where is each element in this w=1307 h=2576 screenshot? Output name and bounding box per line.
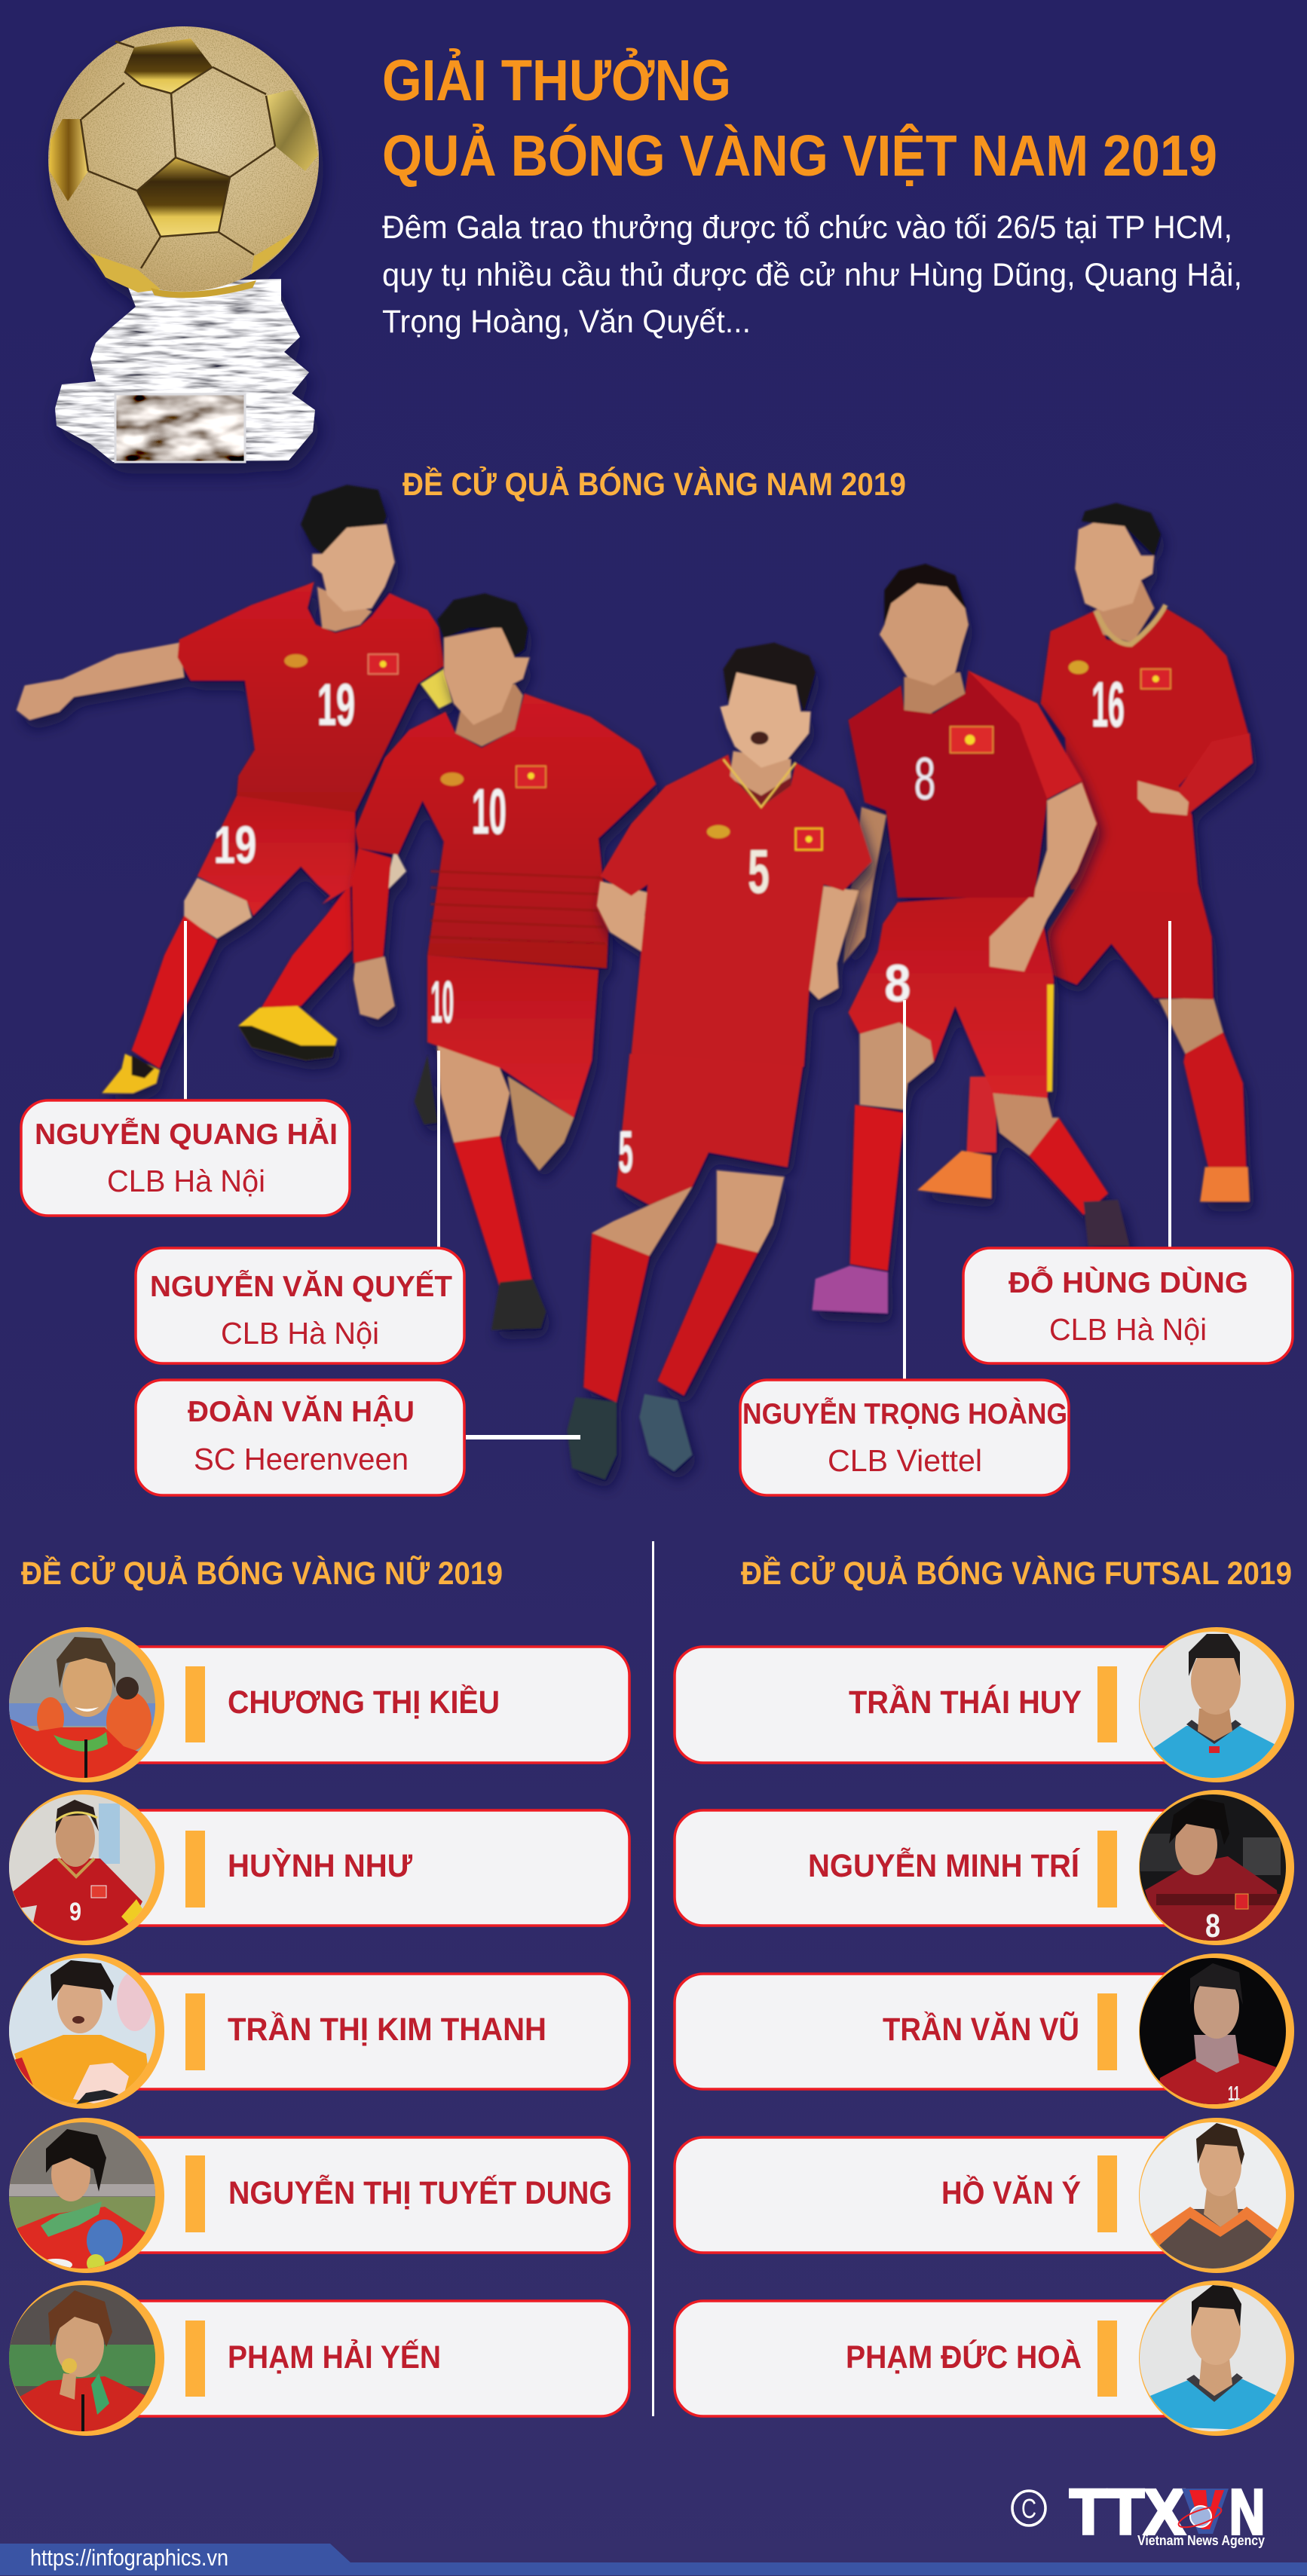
label: Đỗ Hùng Dùng: CLB Hà Nội — [1049, 1312, 1207, 1347]
panel: futsal row 1: TRẦN THÁI HUY — [849, 1684, 1082, 1721]
label: Đoàn Văn Hậu: SC Heerenveen — [194, 1442, 409, 1476]
intro text block — [382, 210, 1242, 340]
players photo group — [17, 485, 1253, 1479]
intro text block: quy tụ nhiều cầu thủ được đề cử như Hùng Dũng, Quang Hải, — [382, 257, 1242, 293]
player: Đoàn Văn Hậu — [567, 643, 871, 1479]
panel: women row 2 — [9, 1790, 629, 1945]
icon: copyright — [1012, 2491, 1045, 2526]
portrait: Trần Thị Kim Thanh — [9, 1958, 155, 2104]
heading: women's nominees: ĐỀ CỬ QUẢ BÓNG VÀNG NỮ 2019 — [21, 1555, 503, 1592]
label: Nguyễn Quang Hải: NGUYỄN QUANG HẢI — [35, 1118, 338, 1151]
connector lines — [184, 921, 1171, 1439]
panel: women row 5: PHẠM HẢI YẾN — [228, 2339, 441, 2376]
label: Đoàn Văn Hậu: ĐOÀN VĂN HẬU — [188, 1395, 415, 1428]
portrait: Nguyễn Minh Trí: 8 — [1205, 1908, 1220, 1944]
heading: men's nominees: ĐỀ CỬ QUẢ BÓNG VÀNG NAM 2019 — [403, 466, 906, 503]
portrait: Huỳnh Như: 9 — [69, 1898, 81, 1926]
panel: women row 4 — [9, 2118, 629, 2273]
panel: futsal row 4: HỒ VĂN Ý — [941, 2174, 1081, 2211]
player: Nguyễn Văn Quyết: 10 — [472, 776, 507, 848]
player: Nguyễn Trọng Hoàng: 8 — [884, 953, 911, 1012]
panel: women row 3 — [9, 1953, 629, 2109]
panel: women row 1 — [9, 1627, 629, 1782]
portrait: Huỳnh Như — [9, 1794, 155, 1941]
player: Nguyễn Quang Hải: 19 — [214, 815, 256, 874]
icon: copyright: C — [1021, 2493, 1036, 2524]
label: Nguyễn Văn Quyết: CLB Hà Nội — [221, 1316, 379, 1351]
label: Nguyễn Trọng Hoàng: CLB Viettel — [828, 1443, 982, 1478]
source url: https://infographics.vn — [30, 2544, 228, 2571]
panel: futsal row 5 — [675, 2281, 1294, 2436]
player: Nguyễn Quang Hải: 19 — [317, 672, 355, 738]
column divider — [652, 1541, 654, 2416]
panel: futsal row 5: PHẠM ĐỨC HOÀ — [846, 2339, 1082, 2376]
title: QUẢ BÓNG VÀNG VIỆT NAM 2019 — [382, 123, 1217, 188]
panel: futsal row 3 — [675, 1953, 1294, 2109]
portrait: Phạm Đức Hoà — [1140, 2285, 1286, 2431]
label: Nguyễn Quang Hải: CLB Hà Nội — [107, 1164, 265, 1198]
panel: women row 2: HUỲNH NHƯ — [228, 1848, 412, 1884]
label: Nguyễn Trọng Hoàng: NGUYỄN TRỌNG HOÀNG — [742, 1397, 1067, 1430]
label: Nguyễn Văn Quyết — [136, 1248, 464, 1363]
label: Đỗ Hùng Dùng: ĐỖ HÙNG DÙNG — [1009, 1265, 1248, 1299]
player: Nguyễn Trọng Hoàng — [812, 564, 1129, 1314]
portrait: Nguyễn Thị Tuyết Dung — [9, 2122, 155, 2272]
title: GIẢI THƯỞNG — [382, 47, 731, 113]
intro text block: Đêm Gala trao thưởng được tổ chức vào tối 26/5 tại TP HCM, — [382, 210, 1232, 246]
portrait: Trần Văn Vũ: 11 — [1228, 2082, 1240, 2105]
footer band — [0, 2544, 1307, 2575]
label: Nguyễn Trọng Hoàng — [740, 1380, 1069, 1495]
player: Đoàn Văn Hậu: 5 — [618, 1118, 633, 1185]
player: Đoàn Văn Hậu: 5 — [748, 836, 770, 906]
label: Đoàn Văn Hậu — [136, 1380, 464, 1495]
panel: futsal row 3: TRẦN VĂN VŨ — [883, 2011, 1079, 2048]
panel: women row 4: NGUYỄN THỊ TUYẾT DUNG — [228, 2174, 612, 2211]
player: Nguyễn Văn Quyết — [352, 593, 656, 1330]
player: Nguyễn Văn Quyết: 10 — [430, 969, 454, 1036]
title — [382, 47, 1217, 188]
portrait: Trần Văn Vũ — [1140, 1958, 1286, 2105]
logo: TTXVN: N — [1229, 2477, 1265, 2547]
label: Đỗ Hùng Dùng — [963, 1248, 1293, 1363]
player: Đỗ Hùng Dùng: 16 — [1091, 669, 1125, 741]
player: Nguyễn Quang Hải — [17, 485, 452, 1093]
logo: TTXVN: Vietnam News Agency — [1137, 2533, 1265, 2548]
logo: TTXVN: TTX — [1070, 2477, 1185, 2547]
panel: futsal row 2: NGUYỄN MINH TRÍ — [808, 1847, 1080, 1884]
panel: women row 5 — [9, 2281, 629, 2436]
panel: futsal row 1 — [675, 1627, 1294, 1782]
icon: golden ball trophy — [48, 26, 319, 462]
logo: TTXVN — [1070, 2477, 1265, 2548]
panel: futsal row 4 — [675, 2118, 1294, 2273]
portrait: Chương Thị Kiều — [9, 1632, 155, 1778]
panel: women row 1: CHƯƠNG THỊ KIỀU — [228, 1684, 500, 1721]
panel: futsal row 2 — [675, 1790, 1294, 1945]
portrait: Phạm Hải Yến — [9, 2285, 155, 2431]
portrait: Trần Thái Huy — [1140, 1632, 1286, 1778]
intro text block: Trọng Hoàng, Văn Quyết... — [382, 304, 751, 340]
panel: women row 3: TRẦN THỊ KIM THANH — [228, 2012, 546, 2048]
label: Nguyễn Quang Hải — [21, 1100, 350, 1216]
player: Nguyễn Trọng Hoàng: 8 — [914, 745, 935, 812]
player: Đỗ Hùng Dùng — [1041, 503, 1253, 1201]
label: Nguyễn Văn Quyết: NGUYỄN VĂN QUYẾT — [150, 1270, 452, 1303]
portrait: Nguyễn Minh Trí — [1140, 1794, 1286, 1944]
portrait: Hồ Văn Ý — [1140, 2122, 1286, 2269]
